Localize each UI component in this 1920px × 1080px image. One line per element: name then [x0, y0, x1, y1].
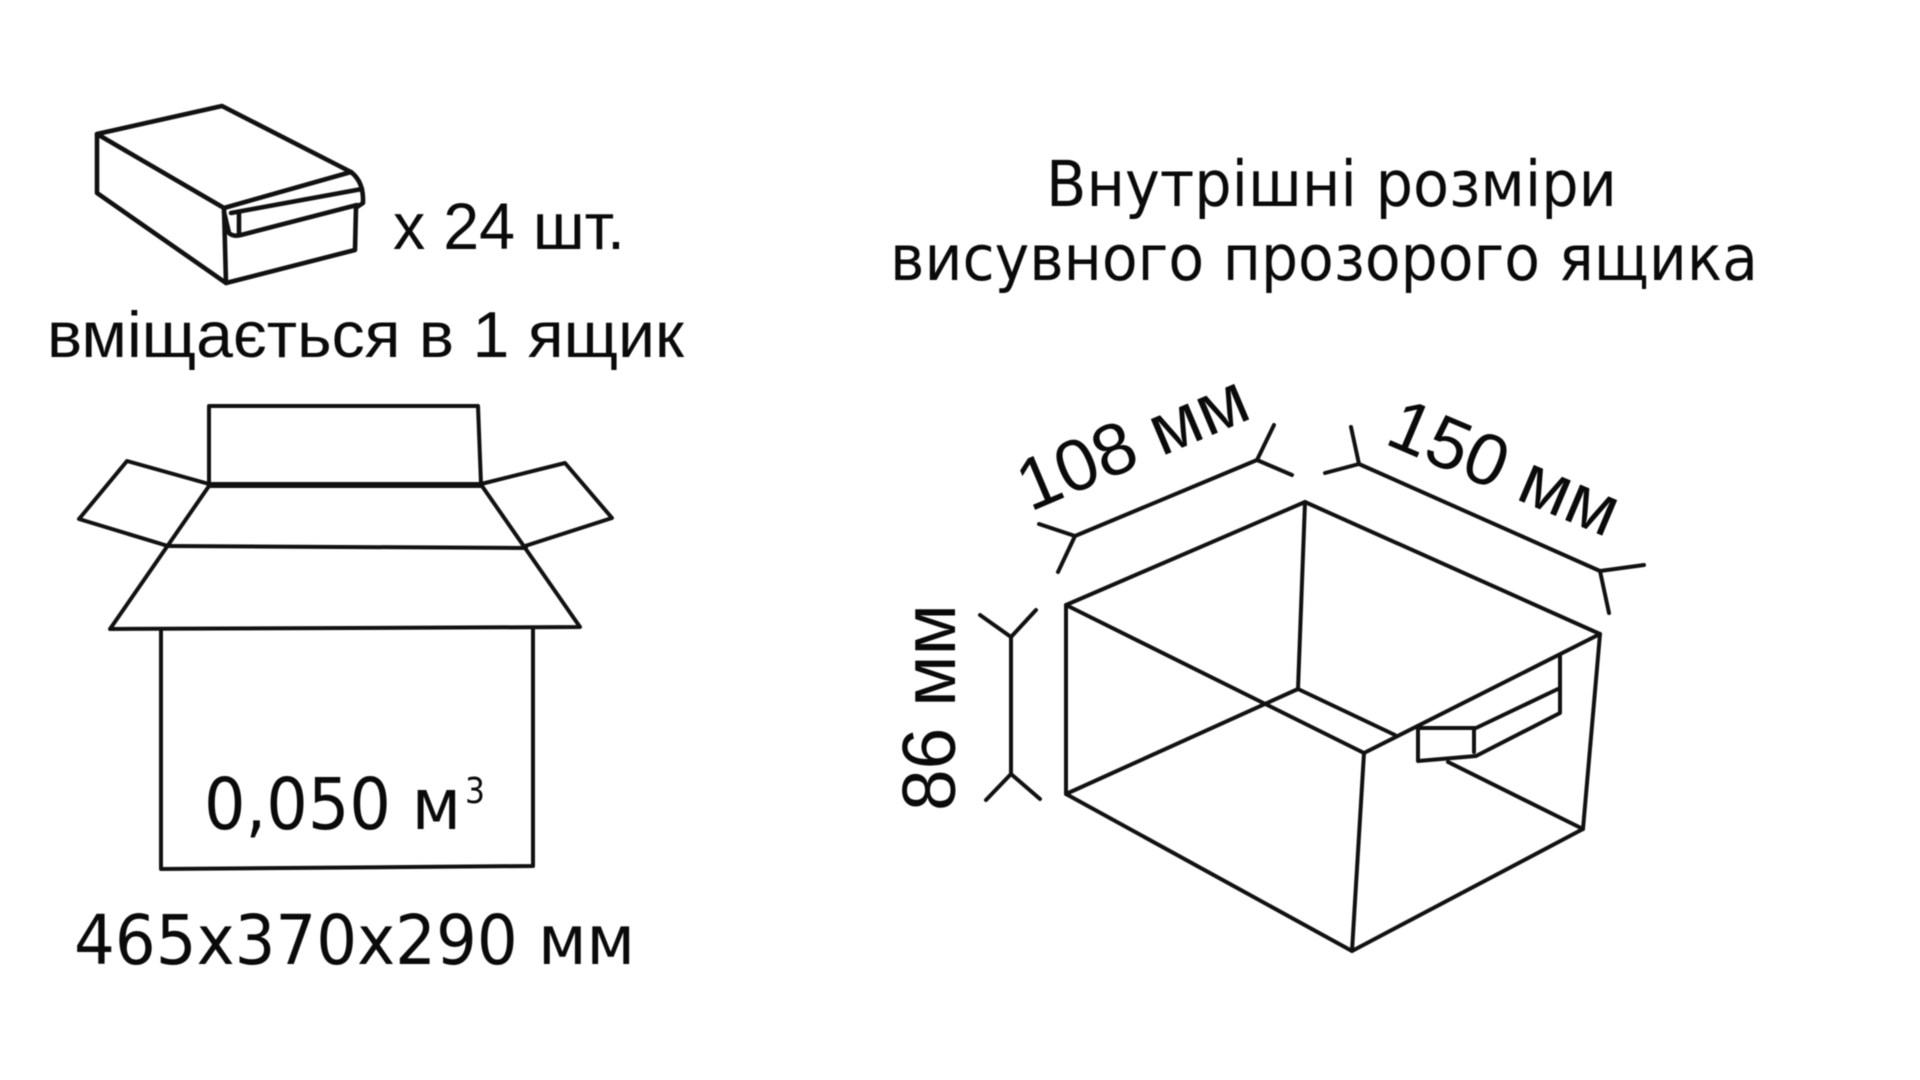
carton volume label: 3 — [465, 771, 485, 812]
panel: inner drawer dimensions — [887, 148, 1758, 951]
icon: transparent drawer wireframe — [1066, 502, 1600, 951]
width label: 108 мм — [1005, 358, 1260, 527]
carton dimensions label: 465x370x290 мм — [74, 901, 635, 981]
length label: 150 мм — [1377, 383, 1632, 552]
heading: Внутрішні розміри — [1046, 148, 1617, 221]
icon: small product box — [97, 106, 363, 283]
carton volume label: 0,050 м — [204, 763, 461, 846]
dimension line: width — [1039, 425, 1292, 572]
fit caption: вміщається в 1 ящик — [47, 298, 685, 371]
icon: open shipping carton — [79, 406, 612, 869]
heading — [890, 148, 1758, 295]
heading: висувного прозорого ящика — [890, 222, 1758, 295]
dimension line: height — [980, 610, 1040, 800]
dimension line: length — [1325, 427, 1644, 613]
quantity label: x 24 шт. — [393, 189, 625, 263]
height label: 86 мм — [887, 604, 971, 811]
panel: packing information — [47, 106, 685, 981]
